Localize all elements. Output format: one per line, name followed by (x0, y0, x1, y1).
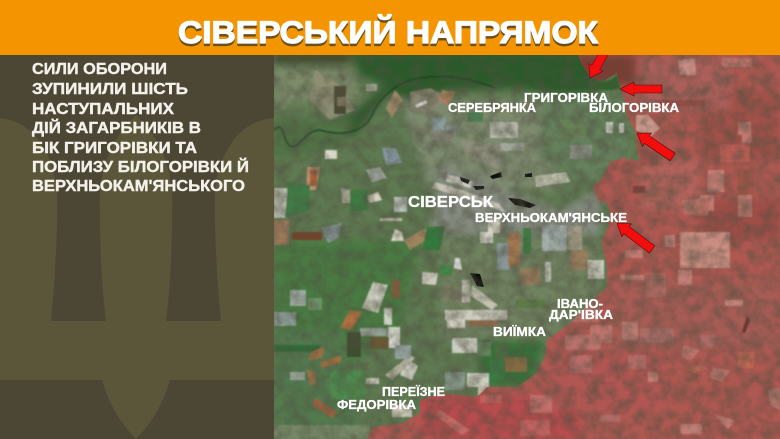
label: Bilohorivka: БІЛОГОРІВКА (589, 101, 679, 115)
satellite map (274, 50, 780, 439)
panel: left background (0, 55, 274, 439)
text block: summary: СИЛИ ОБОРОНИ (32, 61, 167, 78)
title: СІВЕРСЬКИЙ НАПРЯМОК (178, 14, 599, 50)
text block: summary: НАСТУПАЛЬНИХ (32, 101, 175, 118)
label: Serebrianka: СЕРЕБРЯНКА (448, 101, 536, 115)
map: terrain base (274, 55, 640, 439)
map: mottled satellite texture (274, 55, 780, 439)
icon: trident watermark (0, 115, 274, 439)
map: river and ponds (274, 76, 536, 287)
header bar (0, 0, 780, 55)
label: Verkhnokamianske: ВЕРХНЬОКАМ'ЯНСЬКЕ (475, 211, 627, 225)
map: occupied territory in red (367, 55, 780, 439)
label: Siversk: СІВЕРСЬК (408, 194, 494, 211)
title: СІВЕРСЬКИЙ НАПРЯМОК (178, 16, 599, 52)
label: Ivano-Darivka line 1: ІВАНО- (557, 297, 603, 311)
map: white pocket at Bilohorivka (619, 123, 624, 133)
arrow: Grigorivka (620, 82, 662, 96)
text block: summary: ВЕРХНЬОКАМ'ЯНСЬКОГО (32, 178, 245, 195)
label: Pereizne: ПЕРЕЇЗНЕ (382, 384, 445, 399)
arrow: north (583, 46, 613, 82)
label: Ivano-Darivka line 2: ДАР'ІВКА (549, 308, 613, 322)
text block: summary (32, 61, 249, 195)
map: fields (274, 70, 613, 439)
text block: summary: ДІЙ ЗАГАРБНИКІВ В (32, 119, 201, 137)
map labels (337, 91, 679, 412)
text block: summary: БІК ГРИГОРІВКИ ТА (32, 140, 197, 157)
label: Hryhorivka: ГРИГОРІВКА (524, 91, 608, 105)
text block: summary: ПОБЛИЗУ БІЛОГОРІВКИ Й (32, 158, 249, 176)
arrow: Bilohorivka (633, 126, 677, 164)
label: Fedorivka: ФЕДОРІВКА (337, 398, 416, 412)
arrow: Verkhnokamianske (612, 217, 657, 256)
text block: summary: ЗУПИНИЛИ ШІСТЬ (32, 81, 188, 98)
label: Vyimka: ВИЇМКА (493, 324, 546, 339)
map: forest pocket at Grigorivka (597, 73, 620, 91)
map: red-tinted fields (435, 58, 780, 436)
